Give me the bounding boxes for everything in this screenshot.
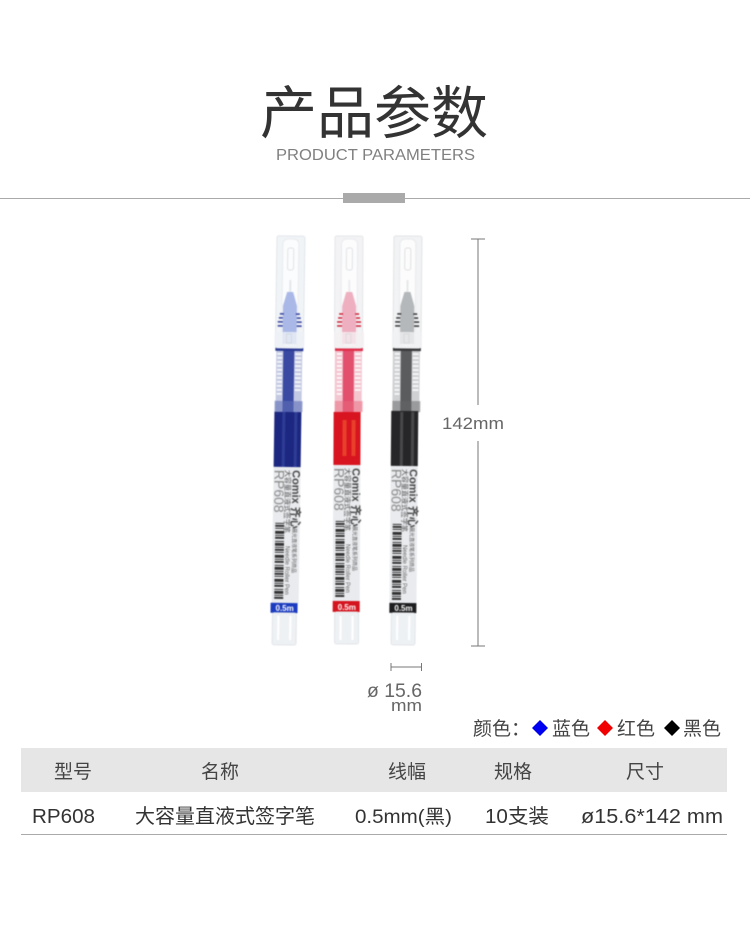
- table header: 名称: [201, 761, 239, 783]
- subtitle: PRODUCT PARAMETERS: [276, 147, 475, 164]
- table row: 大容量直液式签字笔: [135, 805, 315, 828]
- pen: blue: 晨光直液笔系列商品: [290, 528, 298, 573]
- table row: RP608: [32, 806, 95, 828]
- table header: [21, 748, 727, 792]
- pen: red: 晨光直液笔系列商品: [351, 526, 358, 571]
- pen: black: 0.5m: [394, 604, 413, 613]
- dimension: length 142mm: 142mm: [442, 414, 504, 433]
- pen: black: Needle Roller Pen: [401, 545, 407, 594]
- dimension: diameter 15.6 mm: [367, 663, 422, 715]
- icon: red diamond: [597, 720, 613, 736]
- colour legend: 蓝色: [552, 718, 590, 740]
- pen: black: [387, 236, 423, 645]
- pen: blue: [269, 236, 307, 645]
- table header: 规格: [494, 761, 532, 783]
- pen: blue: 大容量直液式签字笔: [283, 470, 293, 533]
- parameters table: [21, 748, 727, 835]
- table row: 10支装: [485, 805, 549, 828]
- table row: 0.5mm(黑): [355, 807, 452, 828]
- table header: 线幅: [388, 761, 426, 783]
- pen: black: 大容量直液式签字笔: [400, 469, 410, 532]
- table header: 尺寸: [626, 761, 664, 783]
- colour legend: 红色: [617, 718, 655, 740]
- pen: black: Comix 齐心: [406, 469, 421, 528]
- pen: black: 晨光直液笔系列商品: [408, 527, 415, 572]
- dimension: diameter 15.6 mm: mm: [391, 696, 422, 715]
- pen: red: Comix 齐心: [349, 468, 363, 527]
- icon: black diamond: [664, 720, 680, 736]
- table row: [21, 805, 727, 835]
- pen: red: RP608: [331, 468, 347, 511]
- colour legend: [473, 718, 721, 740]
- pen: blue: RP608: [271, 470, 288, 513]
- pen: red: 0.5m: [338, 603, 356, 612]
- header divider: [0, 193, 750, 203]
- dimension: diameter 15.6 mm: ø 15.6: [367, 681, 422, 702]
- icon: blue diamond: [532, 720, 548, 736]
- colour legend: 颜色：: [473, 718, 530, 740]
- table row: ø15.6*142 mm: [581, 806, 723, 828]
- pen: blue: 0.5m: [275, 604, 294, 613]
- dimension: length 142mm: [442, 239, 504, 646]
- pen: red: Needle Roller Pen: [344, 544, 350, 593]
- pen: red: 大容量直液式签字笔: [343, 468, 352, 531]
- title: 产品参数: [260, 82, 488, 146]
- pen: red: [331, 236, 364, 644]
- pen: blue: Comix 齐心: [289, 470, 304, 529]
- table header: 型号: [54, 761, 92, 783]
- colour legend: 黑色: [683, 718, 721, 740]
- pen: blue: Needle Roller Pen: [283, 546, 289, 595]
- pen: black: RP608: [388, 469, 405, 512]
